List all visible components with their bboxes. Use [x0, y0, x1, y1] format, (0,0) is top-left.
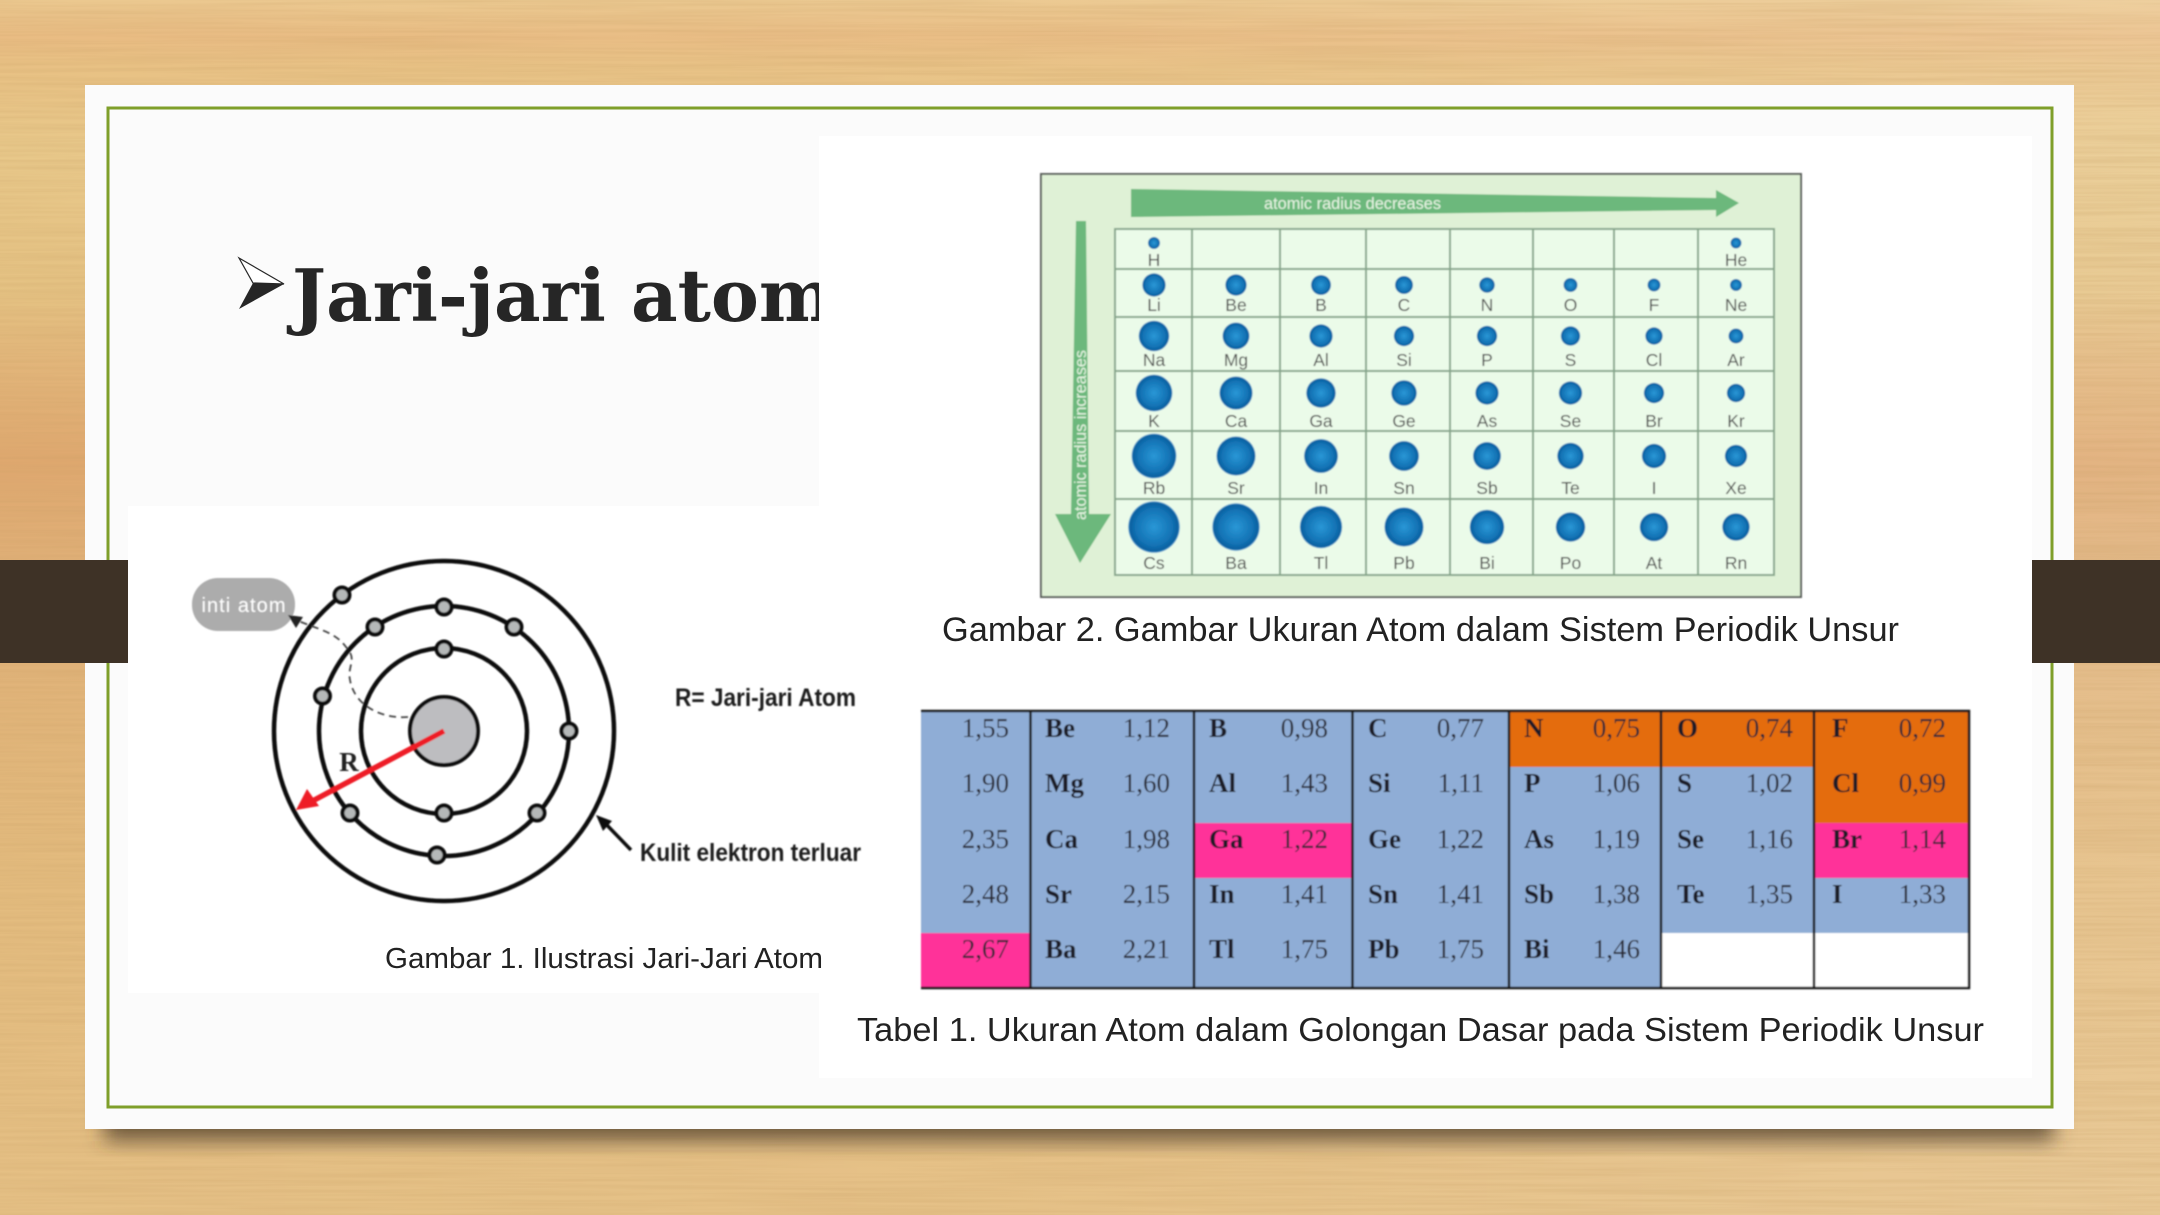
nucleus [410, 697, 478, 765]
table values: 0,99 [1899, 768, 1946, 798]
element symbols: Cs [1143, 553, 1165, 573]
element symbols: O [1564, 295, 1577, 315]
slide drop shadow [104, 1065, 2054, 1141]
element symbols: Sn [1393, 478, 1415, 498]
element symbols: In [1314, 478, 1328, 498]
table values: 1,11 [1438, 768, 1484, 798]
element symbols: Mg [1224, 350, 1248, 370]
table values: 1,22 [1437, 824, 1484, 854]
element symbols: Te [1561, 478, 1580, 498]
dashed pointer to nucleus [288, 615, 408, 717]
table values: 2,15 [1123, 879, 1170, 909]
table values: 1,43 [1281, 768, 1328, 798]
table values: 2,67 [962, 934, 1009, 964]
element symbols: Kr [1727, 411, 1745, 431]
table values: 0,75 [1593, 713, 1640, 743]
element symbols: As [1477, 411, 1497, 431]
element symbols: F [1649, 295, 1659, 315]
table values: 1,35 [1746, 879, 1793, 909]
table values: S [1677, 768, 1692, 798]
table values: C [1368, 713, 1388, 743]
element symbols: S [1565, 350, 1576, 370]
arrow: atomic radius increases [1055, 221, 1111, 563]
element symbols: C [1398, 295, 1410, 315]
table values: Se [1677, 824, 1704, 854]
element symbols: Xe [1725, 478, 1747, 498]
table values: 2,21 [1123, 934, 1170, 964]
element symbols: Se [1560, 411, 1581, 431]
table values: Te [1677, 879, 1705, 909]
element symbols: Ba [1225, 553, 1247, 573]
table values: 1,22 [1281, 824, 1328, 854]
label pill: inti atom [192, 578, 295, 631]
element symbols: Po [1560, 553, 1581, 573]
table values: Be [1045, 713, 1075, 743]
element symbols: Pb [1393, 553, 1415, 573]
table values: 1,06 [1593, 768, 1640, 798]
table values: Sb [1524, 879, 1554, 909]
table values: 1,12 [1123, 713, 1170, 743]
table values: B [1209, 713, 1227, 743]
table values: 1,19 [1593, 824, 1640, 854]
table values: 1,60 [1123, 768, 1170, 798]
element symbols: K [1148, 411, 1160, 431]
table values: Br [1832, 824, 1862, 854]
element symbols: Br [1645, 411, 1663, 431]
chart background [1041, 174, 1801, 597]
table values: 1,90 [962, 768, 1009, 798]
table values: 2,48 [962, 879, 1009, 909]
element symbols: Si [1396, 350, 1412, 370]
element grid [1115, 229, 1774, 575]
green inner frame [108, 108, 2052, 1107]
element symbols: Sr [1227, 478, 1245, 498]
arrow: atomic radius decreases [1131, 189, 1739, 217]
caption: figure 1: Gambar 1. Ilustrasi Jari-Jari Atom [385, 943, 823, 975]
table rules [921, 711, 1969, 988]
element symbols: Ca [1225, 411, 1247, 431]
table values: 0,72 [1899, 713, 1946, 743]
table values: Ca [1045, 824, 1078, 854]
table values: Cl [1832, 768, 1859, 798]
table values: N [1524, 713, 1544, 743]
table values: 0,74 [1746, 713, 1794, 743]
element symbols: P [1481, 350, 1493, 370]
label: R: R [339, 747, 359, 777]
paper slide [85, 85, 2074, 1129]
heading: Jari-jari atom [239, 253, 835, 338]
arrow: radius R [296, 731, 444, 810]
element symbols: Li [1147, 295, 1161, 315]
caption: figure 2: Gambar 2. Gambar Ukuran Atom dalam Sistem Periodik Unsur [942, 611, 1899, 649]
icon: arrow bullet [239, 258, 284, 309]
table values: 1,41 [1437, 879, 1484, 909]
figure 2: periodic chart of atomic sizes [1041, 174, 1801, 597]
table values: Pb [1368, 934, 1400, 964]
element symbols: Ar [1727, 350, 1745, 370]
table values: 0,77 [1437, 713, 1484, 743]
element symbols: N [1481, 295, 1493, 315]
left dark band [0, 560, 130, 663]
heading text: Jari-jari atom [286, 253, 835, 338]
element symbols [1143, 250, 1747, 573]
element symbols: B [1315, 295, 1327, 315]
arrow: outer shell pointer [596, 815, 631, 850]
caption: table 1: Tabel 1. Ukuran Atom dalam Golongan Dasar pada Sistem Periodik Unsur [857, 1011, 1984, 1048]
element symbols: At [1646, 553, 1662, 573]
table values: 1,75 [1281, 934, 1328, 964]
electron shells [274, 561, 614, 901]
table values [962, 713, 1946, 964]
panel: right white image [819, 136, 2032, 1078]
element symbols: I [1652, 478, 1656, 498]
table values: Sn [1368, 879, 1398, 909]
element symbols: Cl [1646, 350, 1662, 370]
table values: Ga [1209, 824, 1244, 854]
table values: 1,46 [1593, 934, 1640, 964]
table values: 1,41 [1281, 879, 1328, 909]
table values: Sr [1045, 879, 1072, 909]
table values: 1,38 [1593, 879, 1640, 909]
table values: O [1677, 713, 1698, 743]
table values: In [1209, 879, 1235, 909]
element symbols: Tl [1314, 553, 1328, 573]
arrow: atomic radius decreases: atomic radius decreases [1264, 194, 1441, 213]
element symbols: Ga [1309, 411, 1333, 431]
element symbols: Bi [1479, 553, 1495, 573]
electrons [315, 588, 576, 862]
element symbols: Ge [1392, 411, 1416, 431]
table values: Mg [1045, 768, 1084, 798]
table values: Si [1368, 768, 1391, 798]
table values: 2,35 [962, 824, 1009, 854]
right dark band [2030, 560, 2160, 663]
table values: Al [1209, 768, 1236, 798]
panel: left white image [128, 506, 819, 993]
table 1: atomic radii [921, 711, 1969, 988]
element symbols: Be [1225, 295, 1247, 315]
figure 1: atom illustration [192, 561, 861, 901]
table values: 1,55 [962, 713, 1009, 743]
table values: 1,02 [1746, 768, 1793, 798]
table values: 0,98 [1281, 713, 1328, 743]
label: outer electron shell: Kulit elektron terluar [640, 839, 861, 867]
table values: 1,16 [1746, 824, 1793, 854]
table cell fills [921, 711, 1969, 988]
table values: 1,98 [1123, 824, 1170, 854]
element symbols: Ne [1725, 295, 1747, 315]
table values: F [1832, 713, 1848, 743]
table values: I [1832, 879, 1843, 909]
table values: 1,14 [1899, 824, 1946, 854]
element symbols: Rn [1725, 553, 1747, 573]
element symbols: Rb [1143, 478, 1165, 498]
element symbols: Al [1313, 350, 1329, 370]
element symbols: He [1725, 250, 1747, 270]
table values: P [1524, 768, 1540, 798]
table values: Tl [1209, 934, 1235, 964]
table values: Ge [1368, 824, 1401, 854]
element symbols: H [1148, 250, 1160, 270]
table values: Ba [1045, 934, 1077, 964]
element symbols: Na [1143, 350, 1165, 370]
element symbols: Sb [1476, 478, 1498, 498]
arrow: atomic radius increases: atomic radius increases [1071, 350, 1090, 520]
table values: Bi [1524, 934, 1550, 964]
label: R = atomic radius: R= Jari-jari Atom [675, 684, 856, 712]
table values: 1,75 [1437, 934, 1484, 964]
atom spheres [1128, 237, 1750, 553]
table values: 1,33 [1899, 879, 1946, 909]
label pill: inti atom: inti atom [202, 595, 286, 617]
table values: As [1524, 824, 1554, 854]
